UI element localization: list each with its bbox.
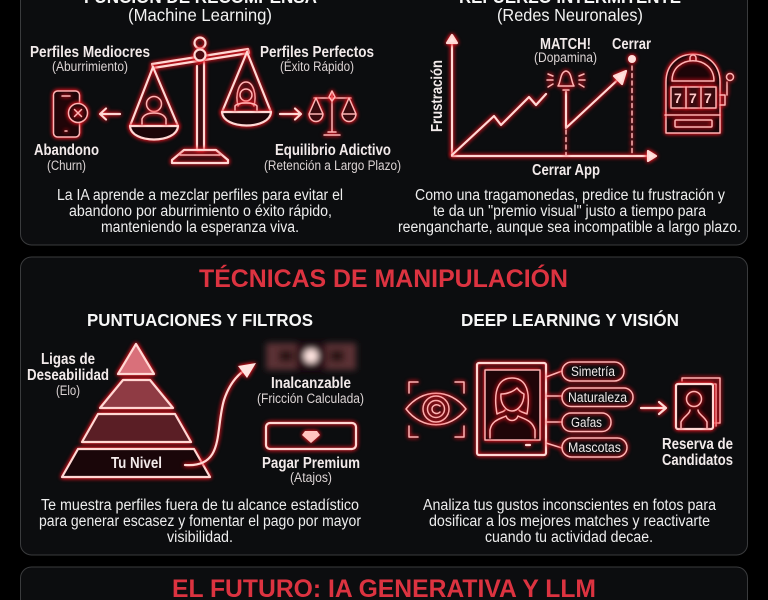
label: perfiles perfectos bbox=[260, 44, 374, 74]
label: inalcanzable: (Fricción Calculada) bbox=[257, 391, 364, 406]
label: ligas de deseabilidad: Deseabilidad bbox=[27, 367, 109, 384]
icon: persona en platillo izquierdo bbox=[142, 96, 166, 124]
icon: tragamonedas: 7 bbox=[674, 90, 682, 106]
panel: técnicas de manipulación bbox=[20, 257, 748, 555]
label: equilibrio adictivo: Equilibrio Adictivo bbox=[275, 142, 391, 159]
heading: refuerzo intermitente bbox=[459, 0, 681, 25]
text: descripción recompensa bbox=[57, 187, 343, 236]
label: reserva de candidatos: Candidatos bbox=[662, 452, 733, 469]
icon: tarjetas de candidatos bbox=[676, 378, 720, 429]
text: descripción refuerzo: te da un "premio visual" justo a tiempo para bbox=[433, 203, 706, 220]
text: descripción recompensa: abandono por aburrimiento o éxito rápido, bbox=[69, 203, 332, 220]
text: descripción refuerzo: reengancharte, aunque sea incompatible a largo plazo. bbox=[398, 219, 741, 236]
icon: foto de perfil analizada bbox=[477, 363, 546, 455]
label: abandono: Abandono bbox=[34, 142, 99, 159]
icon: tragamonedas bbox=[665, 54, 734, 133]
label: perfiles perfectos: Perfiles Perfectos bbox=[260, 44, 374, 61]
panel: función de recompensa y refuerzo bbox=[20, 0, 748, 245]
arrow: hacia equilibrio adictivo bbox=[280, 108, 301, 120]
label: reserva de candidatos: Reserva de bbox=[662, 436, 733, 453]
label: equilibrio adictivo: (Retención a Largo Plazo) bbox=[264, 158, 401, 173]
label: eje frustración: Frustración bbox=[429, 60, 446, 132]
label: cerrar: Cerrar bbox=[612, 36, 651, 53]
icon: ojo escáner bbox=[406, 382, 466, 437]
label: ligas de deseabilidad bbox=[27, 351, 109, 398]
label: inalcanzable bbox=[257, 375, 364, 406]
label: match: (Dopamina) bbox=[534, 50, 597, 65]
chart: pirámide de deseabilidad bbox=[62, 344, 210, 477]
text: descripción puntuaciones bbox=[39, 497, 361, 546]
label: naturaleza: Naturaleza bbox=[568, 390, 627, 405]
arrow: hacia abandono bbox=[100, 108, 120, 120]
icon: tragamonedas: 7 bbox=[689, 90, 697, 106]
icon: balanza grande bbox=[130, 38, 271, 163]
image: perfil borroso bbox=[266, 343, 356, 370]
text: descripción deep learning bbox=[423, 497, 716, 546]
label: abandono: (Churn) bbox=[47, 158, 86, 173]
label: gafas bbox=[562, 413, 611, 432]
icon: mujer en platillo derecho bbox=[235, 82, 257, 110]
arrow: hacia reserva bbox=[641, 402, 666, 414]
label: inalcanzable: Inalcanzable bbox=[271, 375, 351, 392]
text: descripción deep learning: dosificar a los mejores matches y reactivarte bbox=[429, 513, 710, 530]
label: pagar premium bbox=[262, 455, 360, 485]
label: pagar premium: (Atajos) bbox=[290, 470, 332, 485]
label: simetría bbox=[562, 362, 624, 381]
label: abandono bbox=[34, 142, 99, 173]
icon: móvil con abandono bbox=[54, 91, 88, 137]
text: descripción recompensa: La IA aprende a mezclar perfiles para evitar el bbox=[57, 187, 343, 204]
label: reserva de candidatos bbox=[662, 436, 733, 469]
label: gafas: Gafas bbox=[571, 415, 602, 430]
label: simetría: Simetría bbox=[571, 364, 615, 379]
heading: refuerzo intermitente: (Redes Neuronales) bbox=[497, 5, 643, 25]
text: descripción deep learning: cuando tu actividad decae. bbox=[485, 529, 653, 546]
icon: botón premium bbox=[266, 423, 356, 449]
label: perfiles mediocres: Perfiles Mediocres bbox=[30, 44, 150, 61]
connectors: rasgos bbox=[546, 371, 562, 448]
label: equilibrio adictivo bbox=[264, 142, 401, 173]
label: tu nivel: Tu Nivel bbox=[111, 455, 162, 472]
label: perfiles mediocres bbox=[30, 44, 150, 74]
text: descripción recompensa: manteniendo la esperanza viva. bbox=[101, 219, 299, 236]
panel: el futuro bbox=[20, 567, 748, 600]
label: match bbox=[534, 36, 597, 65]
label: ligas de deseabilidad: Ligas de bbox=[41, 351, 95, 368]
icon: tragamonedas: 7 bbox=[704, 90, 712, 106]
text: descripción deep learning: Analiza tus gustos inconscientes en fotos para bbox=[423, 497, 716, 514]
text: descripción refuerzo bbox=[398, 187, 741, 236]
label: perfiles perfectos: (Éxito Rápido) bbox=[280, 59, 354, 74]
text: descripción puntuaciones: Te muestra perfiles fuera de tu alcance estadístico bbox=[41, 497, 359, 514]
icon: balanza pequeña bbox=[309, 91, 356, 135]
label: cerrar app: Cerrar App bbox=[532, 162, 600, 179]
text: descripción puntuaciones: visibilidad. bbox=[167, 529, 233, 546]
text: descripción puntuaciones: para generar escasez y fomentar el pago por mayor bbox=[39, 513, 361, 530]
label: match: MATCH! bbox=[540, 36, 591, 53]
heading: deep learning y visión: DEEP LEARNING Y VISIÓN bbox=[461, 309, 679, 330]
text: descripción refuerzo: Como una tragamonedas, predice tu frustración y bbox=[415, 187, 725, 204]
label: ligas de deseabilidad: (Elo) bbox=[56, 383, 80, 398]
heading: puntuaciones y filtros: PUNTUACIONES Y FILTROS bbox=[87, 310, 313, 330]
heading: función de recompensa: (Machine Learning) bbox=[128, 5, 272, 25]
heading: función de recompensa bbox=[84, 0, 317, 25]
arrow: curva hacia inalcanzable bbox=[185, 363, 256, 465]
label: pagar premium: Pagar Premium bbox=[262, 455, 360, 472]
label: perfiles mediocres: (Aburrimiento) bbox=[52, 59, 128, 74]
chart: frustración y refuerzo bbox=[429, 35, 656, 179]
icon: campana bbox=[547, 71, 585, 90]
title: técnicas de manipulación: TÉCNICAS DE MANIPULACIÓN bbox=[199, 263, 568, 293]
label: mascotas: Mascotas bbox=[568, 440, 621, 455]
